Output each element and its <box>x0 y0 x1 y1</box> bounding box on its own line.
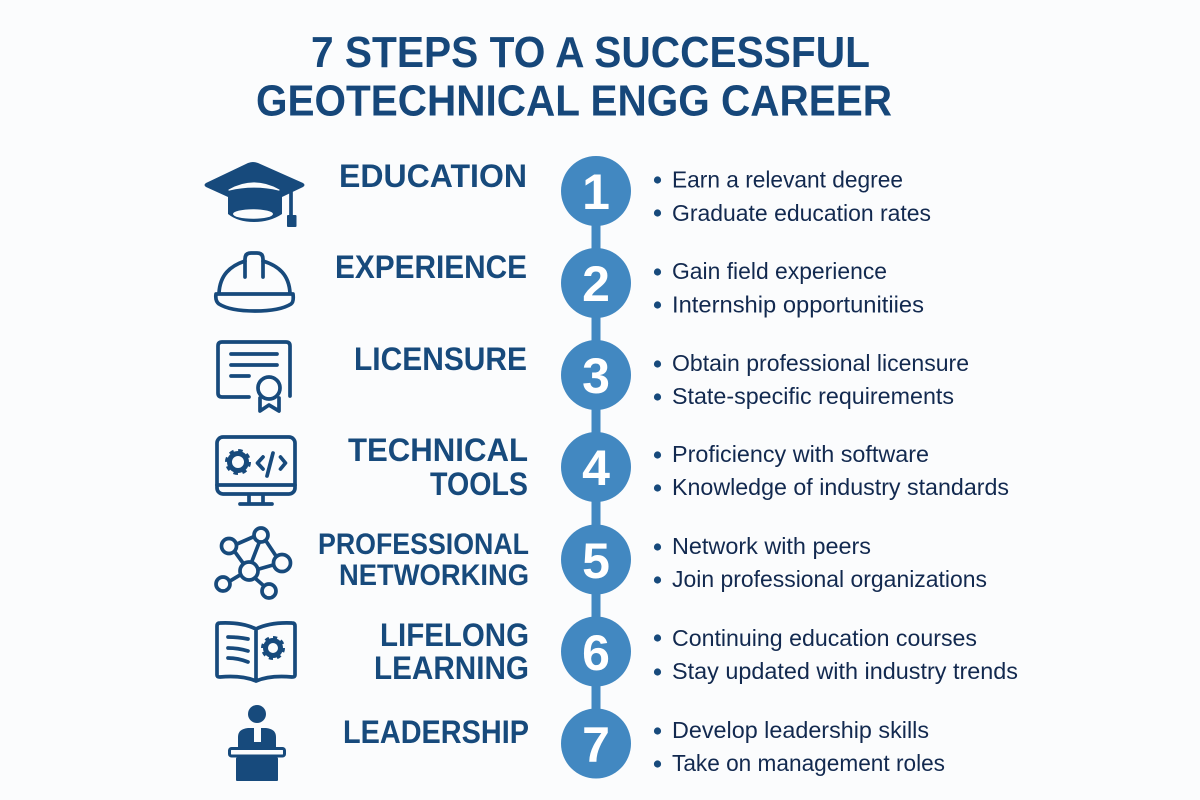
bullets: Join professional organizations <box>672 566 987 592</box>
bullets: Earn a relevant degree <box>672 166 903 192</box>
number badge: 5 <box>582 533 610 589</box>
icon: monitor with gear and code <box>217 437 295 504</box>
number badge: 3 <box>582 348 610 404</box>
icon: open book with gear <box>217 623 295 681</box>
bullets <box>654 625 1018 684</box>
number badge: 7 <box>582 717 610 773</box>
bullets <box>654 258 924 318</box>
bullets <box>654 350 969 409</box>
step 4: technical tools <box>217 432 1009 504</box>
bullets: State-specific requirements <box>672 383 954 409</box>
bullets: Obtain professional licensure <box>672 350 969 376</box>
bullets <box>654 166 931 226</box>
label <box>318 528 529 592</box>
label <box>348 432 528 502</box>
icon: network nodes <box>216 528 290 598</box>
label: EXPERIENCE <box>335 249 527 285</box>
bullets <box>654 533 987 592</box>
step 1: education <box>204 156 931 227</box>
bullets: Stay updated with industry trends <box>672 658 1018 684</box>
number badge <box>561 524 631 594</box>
number badge <box>561 248 631 318</box>
number badge <box>561 432 631 502</box>
step 3: licensure <box>218 340 969 411</box>
icon: speaker at podium <box>230 705 284 781</box>
number badge: 4 <box>582 440 610 496</box>
label: LIFELONG <box>380 617 529 653</box>
number badge <box>561 340 631 410</box>
number badge: 6 <box>582 625 610 681</box>
title: GEOTECHNICAL ENGG CAREER <box>256 76 892 126</box>
label: EDUCATION <box>339 158 527 194</box>
bullets: Internship opportunitiies <box>672 292 924 318</box>
bullets: Take on management roles <box>672 750 945 776</box>
number badge: 2 <box>582 256 610 312</box>
title: 7 STEPS TO A SUCCESSFUL <box>311 28 870 77</box>
title <box>256 28 892 126</box>
label: NETWORKING <box>339 559 529 592</box>
label <box>374 617 529 686</box>
label: TECHNICAL <box>348 432 528 468</box>
step 6: lifelong learning <box>217 616 1018 686</box>
bullets: Graduate education rates <box>672 200 931 226</box>
step 2: experience <box>216 248 924 318</box>
icon: certificate <box>218 342 290 411</box>
label: LEARNING <box>374 650 529 686</box>
label: TOOLS <box>430 466 528 502</box>
number badge <box>561 708 631 778</box>
timeline connector <box>592 191 600 743</box>
number badge: 1 <box>582 164 610 220</box>
bullets: Develop leadership skills <box>672 717 929 743</box>
bullets: Knowledge of industry standards <box>672 474 1009 500</box>
bullets <box>654 441 1009 500</box>
bullets: Continuing education courses <box>672 625 977 651</box>
label: LEADERSHIP <box>343 714 529 750</box>
icon: hard hat <box>216 253 293 311</box>
number badge <box>561 616 631 686</box>
number badge <box>561 156 631 226</box>
bullets: Proficiency with software <box>672 441 929 467</box>
label: PROFESSIONAL <box>318 528 529 561</box>
step 5: professional networking <box>216 524 987 598</box>
label: LICENSURE <box>354 341 527 377</box>
bullets: Network with peers <box>672 533 871 559</box>
step 7: leadership <box>230 705 945 781</box>
bullets: Gain field experience <box>672 258 887 284</box>
icon: graduation cap <box>204 162 304 227</box>
bullets <box>654 717 945 776</box>
